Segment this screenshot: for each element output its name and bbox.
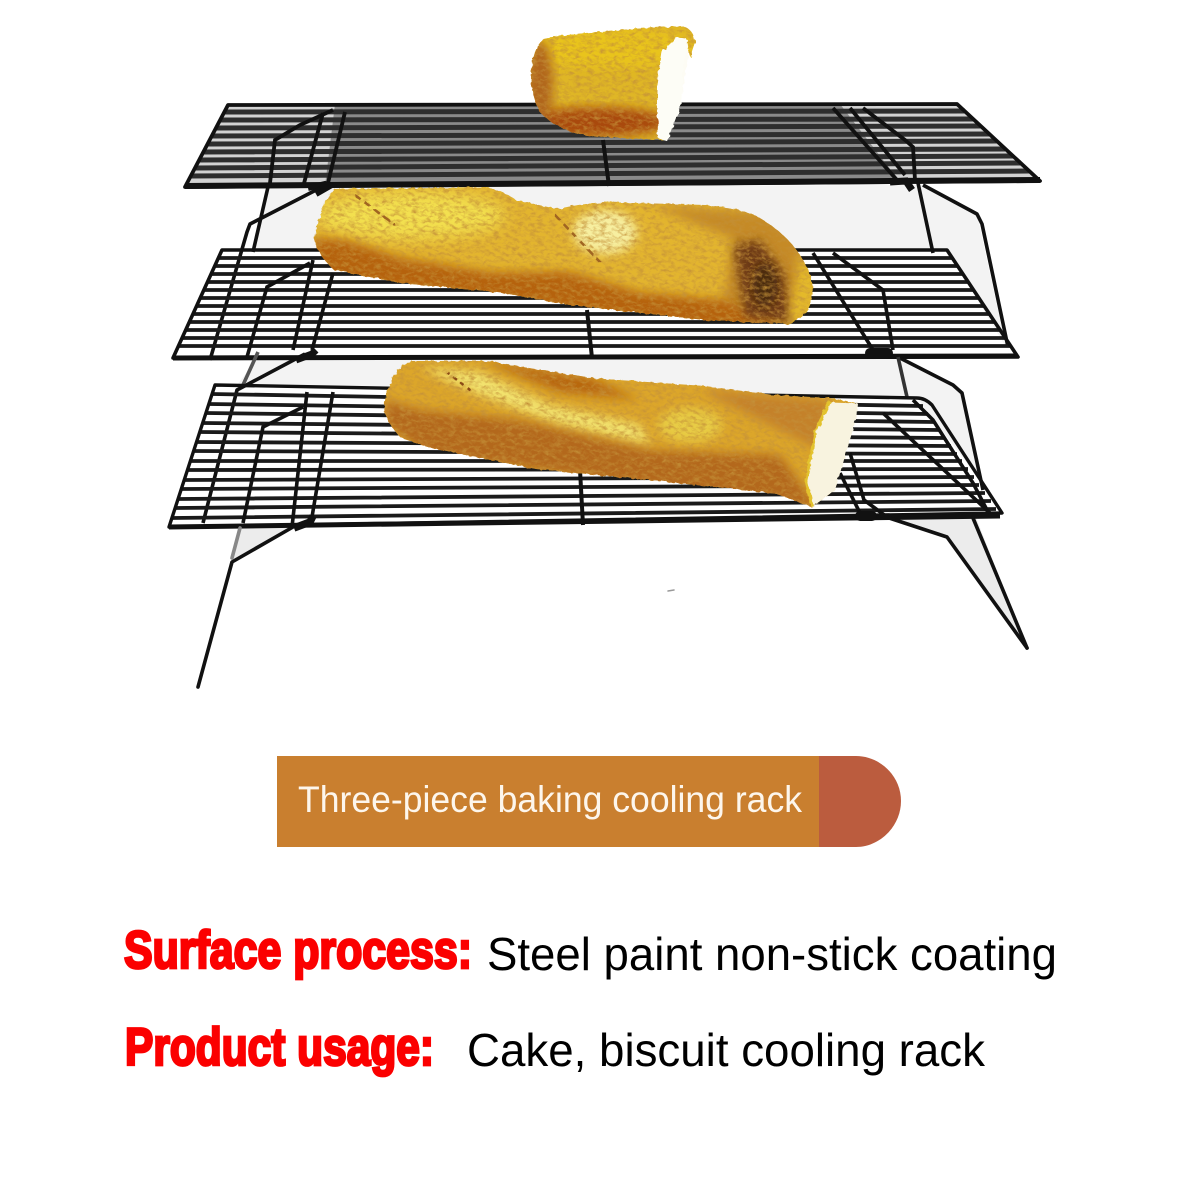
spec row: product usage [125,1018,986,1077]
label: surface process: Surface process: [124,921,472,980]
spec row: surface process [124,921,1057,980]
label: product usage: Product usage: [125,1018,434,1077]
bread: long lower loaf [384,360,858,508]
banner: product name [277,756,901,847]
rack: middle tier [173,250,1018,360]
value: surface process: Steel paint non-stick coating [487,928,1057,980]
banner rounded cap [819,756,901,847]
product photo: stacked cooling rack [169,20,1040,687]
value: product usage: Cake, biscuit cooling rack [467,1024,986,1076]
banner text: Three-piece baking cooling rack [298,779,802,820]
banner body [277,756,820,847]
bread: small top piece [530,26,696,141]
infographic canvas [124,26,1054,1078]
rack: top tier [185,104,1040,194]
bread: long middle loaf [314,186,814,325]
shading between racks [232,185,1027,647]
legs: top tier to middle tier [210,183,1008,360]
legs: feet below bottom tier [198,515,1027,687]
legs: middle tier to bottom tier [203,352,983,523]
rack: bottom tier [169,385,1002,528]
